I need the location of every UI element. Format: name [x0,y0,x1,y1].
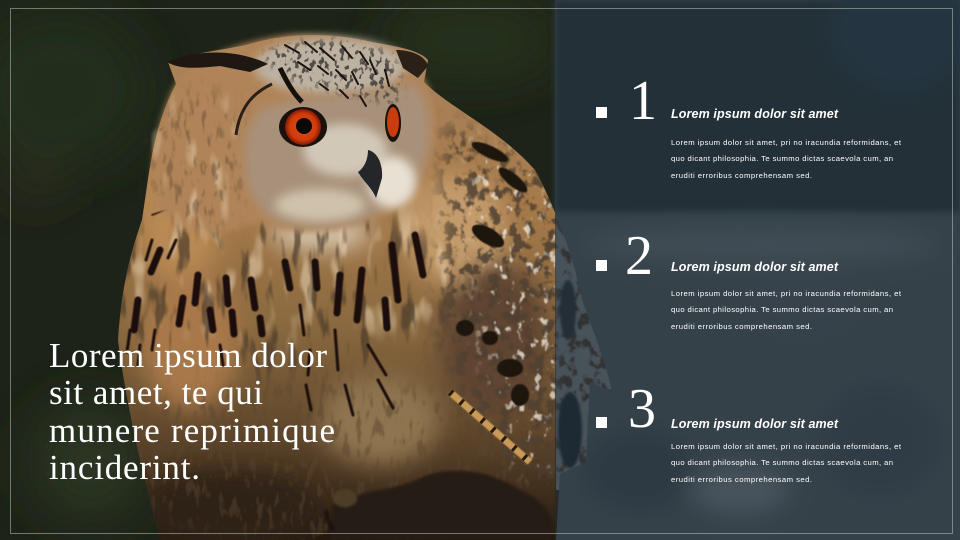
belly texture [142,384,498,540]
panel: translucent dark overlay [555,0,960,540]
crown speckles [262,40,400,105]
title text: inciderint. [49,448,200,487]
title text: munere reprimique [49,411,335,450]
body text 1: quo dicant philosophia. Te summo dictas scaevola cum, an [671,154,893,163]
vertical streak texture [120,211,456,382]
title text: sit amet, te qui [49,373,263,412]
body text 1: eruditi erroribus comprehensam sed. [671,171,812,180]
icon: left eye [279,107,327,147]
body text 2: quo dicant philosophia. Te summo dictas scaevola cum, an [671,305,893,314]
heading 3: Lorem ipsum dolor sit amet [671,417,839,431]
bullet 1 [596,107,607,118]
body text 2: Lorem ipsum dolor sit amet, pri no iracundia reformidans, et [671,289,902,298]
feather streaks [127,99,423,415]
ear tufts [167,52,268,72]
body text 3: Lorem ipsum dolor sit amet, pri no iracundia reformidans, et [671,442,902,451]
number 2: 2 [625,225,653,287]
glove [326,471,553,540]
body text 3 [671,442,902,484]
cream feathers [110,200,490,340]
tail bar feather [450,392,530,462]
list item 1 [596,70,902,180]
heading 1: Lorem ipsum dolor sit amet [671,107,839,121]
body text 2: eruditi erroribus comprehensam sed. [671,322,812,331]
body text 2 [671,289,902,331]
title text [49,336,335,487]
list item 3 [596,378,902,484]
title text: Lorem ipsum dolor [49,336,327,375]
ruff streaks [152,90,248,230]
right wing seen through panel [550,190,622,490]
heading 2: Lorem ipsum dolor sit amet [671,260,839,274]
bullet 2 [596,260,607,271]
wing dark blotches [456,138,531,406]
list item 2 [596,225,902,331]
number 1: 1 [629,70,657,132]
body text 3: quo dicant philosophia. Te summo dictas scaevola cum, an [671,458,893,467]
body text 1 [671,138,902,180]
icon: beak [358,150,382,198]
number 3: 3 [628,378,656,440]
bullet 3 [596,417,607,428]
owl head [152,35,435,232]
owl photo illustration [100,20,622,540]
body text 1: Lorem ipsum dolor sit amet, pri no iracundia reformidans, et [671,138,902,147]
facial disc line and brow [280,68,302,102]
body text 3: eruditi erroribus comprehensam sed. [671,475,812,484]
wing texture [440,120,565,470]
icon: right eye [385,104,401,142]
